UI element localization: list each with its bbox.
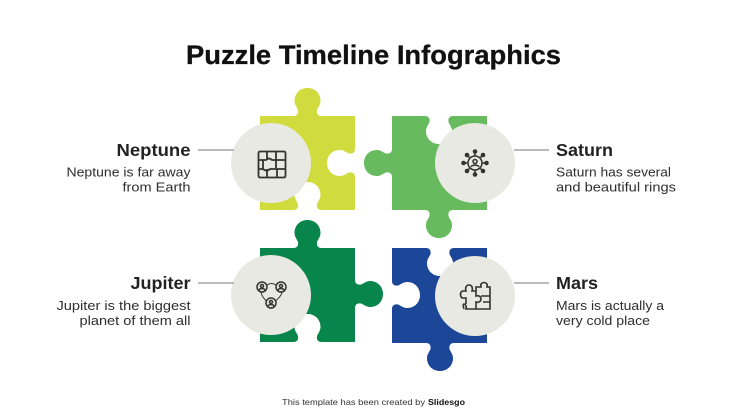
text block: Saturn xyxy=(514,140,677,194)
puzzle piece: light green xyxy=(364,115,487,238)
text block: Neptune: Neptune is far away xyxy=(66,164,191,180)
text block: Mars xyxy=(514,273,665,328)
footer credit: This template has been created by xyxy=(282,397,426,407)
circle: Neptune xyxy=(231,123,311,203)
circle: Mars xyxy=(435,256,515,336)
text block: Jupiter xyxy=(56,273,234,328)
text block: Jupiter: planet of them all xyxy=(80,313,191,328)
text block: Saturn: Saturn has several xyxy=(556,164,671,180)
icon: network person xyxy=(461,149,489,177)
circle: Jupiter xyxy=(231,255,311,335)
puzzle piece: blue xyxy=(391,247,487,371)
text block: Neptune: Neptune xyxy=(116,140,191,160)
text block: Mars: Mars xyxy=(556,273,598,293)
icon: puzzle pieces xyxy=(460,282,490,309)
text block: Saturn: Saturn xyxy=(556,140,613,160)
puzzle piece: dark green xyxy=(260,220,383,343)
icon: maze grid xyxy=(258,151,286,178)
text block: Neptune xyxy=(66,140,234,194)
text block: Mars: Mars is actually a xyxy=(556,298,665,313)
icon: connected people xyxy=(257,282,286,308)
text block: Neptune: from Earth xyxy=(122,180,190,194)
circle: Saturn xyxy=(435,123,515,203)
text block: Jupiter: Jupiter is the biggest xyxy=(56,298,191,313)
text block: Saturn: and beautiful rings xyxy=(556,180,677,194)
text block: Mars: very cold place xyxy=(556,313,650,328)
puzzle piece: yellow xyxy=(260,88,356,211)
footer credit: Slidesgo xyxy=(428,397,465,407)
text block: Jupiter: Jupiter xyxy=(130,273,191,293)
title: Puzzle Timeline Infographics xyxy=(186,40,561,70)
